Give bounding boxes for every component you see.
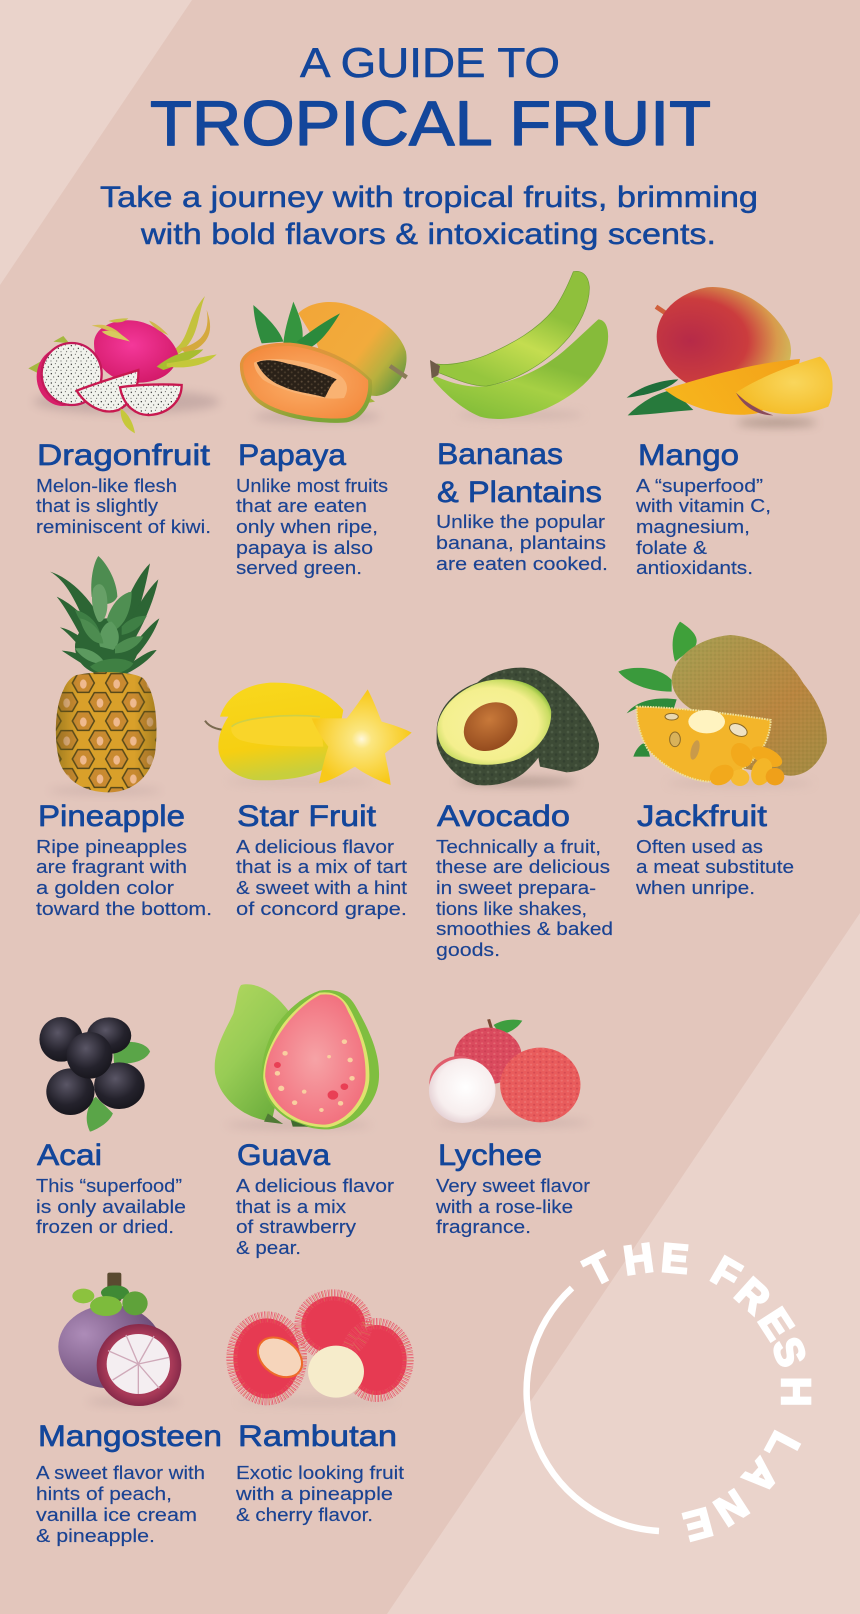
description: Avocado: goods. <box>436 940 500 960</box>
description: Avocado: smoothies & baked <box>436 919 613 939</box>
logo: The Fresh Lane: A <box>734 1450 788 1503</box>
heading: Bananas and Plantains <box>437 438 602 509</box>
logo: The Fresh Lane: E <box>679 1499 717 1550</box>
description: Mangosteen: vanilla ice cream <box>36 1505 197 1525</box>
description: Guava: that is a mix <box>236 1197 346 1217</box>
description: Pineapple: a golden color <box>36 878 174 898</box>
description: Jackfruit: a meat substitute <box>636 857 794 877</box>
logo: The Fresh Lane: F <box>704 1247 749 1299</box>
heading: Acai: Acai <box>37 1139 102 1172</box>
description: Lychee: Very sweet flavor <box>436 1176 590 1196</box>
description: Dragonfruit <box>36 476 211 537</box>
description: Mango: folate & <box>636 538 707 558</box>
description: Papaya: served green. <box>236 558 362 578</box>
heading: Papaya: Papaya <box>238 439 346 472</box>
heading: Bananas and Plantains: Bananas <box>437 438 563 471</box>
icon: rambutan <box>232 1295 408 1405</box>
icon: dragonfruit <box>28 296 220 433</box>
icon: star fruit <box>205 683 412 785</box>
description: Mango: magnesium, <box>636 517 750 537</box>
description: Acai <box>36 1176 186 1237</box>
heading: Mangosteen: Mangosteen <box>38 1420 222 1453</box>
description: Mango: with vitamin C, <box>635 496 771 516</box>
description: Bananas and Plantains <box>436 512 608 574</box>
heading: Lychee: Lychee <box>438 1139 542 1172</box>
logo: The Fresh Lane: E <box>659 1234 690 1282</box>
description: Mango: antioxidants. <box>636 558 753 578</box>
description: Rambutan <box>235 1463 404 1525</box>
description: Pineapple: are fragrant with <box>36 857 187 877</box>
description: Avocado: in sweet prepara- <box>436 878 596 898</box>
description: Pineapple <box>36 837 212 919</box>
description: Mangosteen: hints of peach, <box>36 1484 172 1504</box>
logo: The Fresh Lane: N <box>706 1480 756 1535</box>
description: Bananas and Plantains: banana, plantains <box>436 533 606 553</box>
subtitle <box>100 181 758 251</box>
description: Papaya: papaya is also <box>236 538 373 558</box>
description: Papaya: only when ripe, <box>236 517 378 537</box>
description: Star Fruit: that is a mix of tart <box>236 857 407 877</box>
description: Papaya: that are eaten <box>236 496 367 516</box>
description: Guava: A delicious flavor <box>236 1176 394 1196</box>
logo: The Fresh Lane <box>527 1234 819 1550</box>
description: Avocado: Technically a fruit, <box>436 837 601 857</box>
panel: mangosteen <box>36 1273 222 1546</box>
description: Papaya <box>236 476 388 578</box>
subtitle: with bold flavors & intoxicating scents. <box>140 218 716 251</box>
heading: Jackfruit: Jackfruit <box>637 800 768 833</box>
panel: bananas and plantains <box>430 271 608 574</box>
title: TROPICAL FRUIT <box>150 89 711 159</box>
description: Rambutan: & cherry flavor. <box>236 1505 373 1525</box>
title <box>150 39 711 159</box>
description: Bananas and Plantains: are eaten cooked. <box>436 554 608 574</box>
description: Mangosteen: & pineapple. <box>36 1526 155 1546</box>
description: Star Fruit: A delicious flavor <box>236 837 394 857</box>
description: Avocado: these are delicious <box>436 857 610 877</box>
description: Mangosteen <box>36 1463 205 1546</box>
description: Jackfruit: Often used as <box>636 837 763 857</box>
panel: papaya <box>236 302 407 578</box>
panel: mango <box>627 287 833 578</box>
description: Pineapple: Ripe pineapples <box>36 837 187 857</box>
panel: pineapple <box>36 556 212 919</box>
description: Guava: & pear. <box>236 1238 301 1258</box>
icon: avocado <box>437 668 599 786</box>
description: Guava <box>236 1176 394 1258</box>
description: Guava: of strawberry <box>236 1217 356 1237</box>
icon: mango <box>627 287 833 426</box>
description: Star Fruit: of concord grape. <box>236 899 407 919</box>
panel: avocado <box>436 668 613 960</box>
description: Acai: frozen or dried. <box>36 1217 174 1237</box>
description: Lychee: fragrance. <box>436 1217 531 1237</box>
description: Rambutan: Exotic looking fruit <box>236 1463 404 1483</box>
description: Dragonfruit: reminiscent of kiwi. <box>36 517 211 537</box>
subtitle: Take a journey with tropical fruits, brimming <box>100 181 758 214</box>
heading: Star Fruit: Star Fruit <box>237 800 377 833</box>
panel: lychee <box>429 1019 590 1237</box>
description: Rambutan: with a pineapple <box>235 1484 393 1504</box>
heading: Rambutan: Rambutan <box>238 1420 397 1453</box>
description: Lychee: with a rose-like <box>435 1197 573 1217</box>
description: Dragonfruit: that is slightly <box>36 496 158 516</box>
description: Acai: is only available <box>36 1197 186 1217</box>
icon: papaya <box>240 302 407 423</box>
heading: Mango: Mango <box>638 439 739 472</box>
logo: The Fresh Lane: H <box>773 1377 819 1406</box>
description: Jackfruit <box>635 837 794 898</box>
panel: rambutan <box>232 1295 408 1525</box>
background accent: top left <box>0 0 192 285</box>
heading: Avocado: Avocado <box>437 800 570 833</box>
description: Mango <box>635 476 771 578</box>
logo: The Fresh Lane: H <box>621 1234 656 1284</box>
title: A GUIDE TO <box>300 39 560 86</box>
description: Bananas and Plantains: Unlike the popular <box>436 512 605 532</box>
panel: dragonfruit <box>28 296 220 537</box>
description: Dragonfruit: Melon-like flesh <box>36 476 177 496</box>
panel: jackfruit <box>618 622 827 898</box>
heading: Dragonfruit: Dragonfruit <box>37 439 211 472</box>
icon: guava <box>215 984 379 1129</box>
description: Mango: A “superfood” <box>636 476 763 496</box>
icon: lychee <box>429 1019 589 1126</box>
panel: guava <box>215 984 394 1258</box>
icon: acai <box>39 1017 150 1132</box>
description: Star Fruit <box>236 837 407 919</box>
icon: jackfruit <box>618 622 827 789</box>
description: Lychee <box>435 1176 590 1237</box>
description: Avocado: tions like shakes, <box>436 899 587 919</box>
logo: The Fresh Lane: L <box>757 1425 809 1468</box>
heading: Guava: Guava <box>237 1139 330 1172</box>
logo: The Fresh Lane: R <box>727 1269 779 1322</box>
icon: mangosteen <box>58 1273 181 1406</box>
icon: bananas <box>430 271 608 420</box>
panel: star fruit <box>205 683 412 919</box>
logo: The Fresh Lane: E <box>749 1300 803 1348</box>
logo: The Fresh Lane: S <box>763 1331 816 1373</box>
panel: acai <box>36 1017 186 1237</box>
heading: Pineapple: Pineapple <box>38 800 185 833</box>
description: Pineapple: toward the bottom. <box>36 899 212 919</box>
logo: The Fresh Lane: T <box>577 1243 620 1295</box>
icon: pineapple <box>48 556 162 793</box>
description: Jackfruit: when unripe. <box>635 878 755 898</box>
description: Avocado <box>436 837 613 960</box>
description: Papaya: Unlike most fruits <box>236 476 388 496</box>
description: Acai: This “superfood” <box>36 1176 182 1196</box>
description: Mangosteen: A sweet flavor with <box>36 1463 205 1483</box>
background accent: bottom right <box>387 913 860 1614</box>
description: Star Fruit: & sweet with a hint <box>236 878 407 898</box>
heading: Bananas and Plantains: & Plantains <box>437 476 602 509</box>
